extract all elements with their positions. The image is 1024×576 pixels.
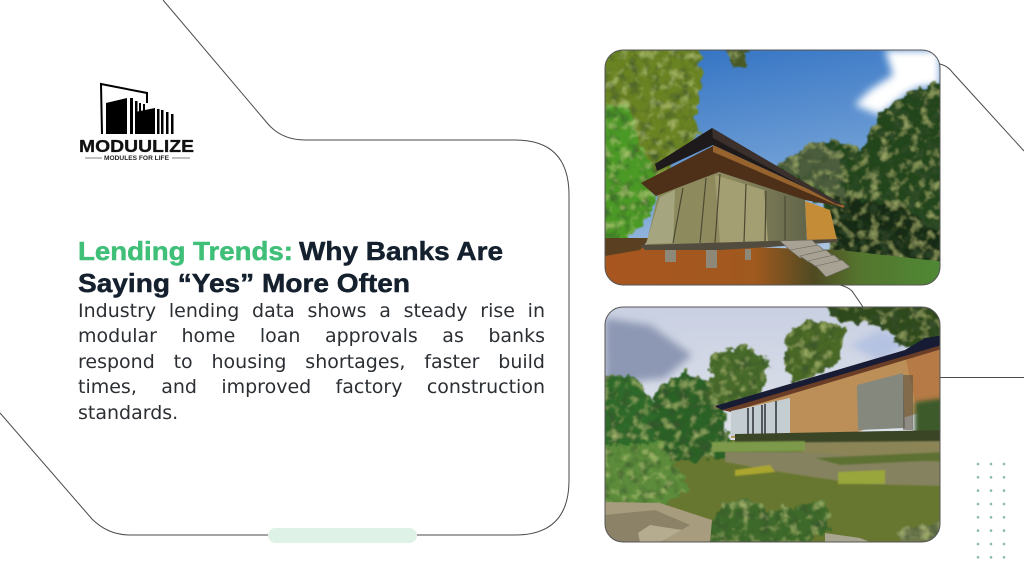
- photo: long house with garden: [600, 300, 945, 545]
- terraces: [712, 441, 945, 486]
- roof: [715, 335, 945, 410]
- house: glass wall: [646, 172, 807, 245]
- clouds: [855, 50, 940, 115]
- logo frame: [101, 84, 147, 134]
- ground: [606, 244, 940, 284]
- outline connector: top right: [940, 64, 1024, 151]
- dot grid: [977, 463, 1005, 559]
- logo: [79, 84, 194, 162]
- house: soffit: [641, 146, 845, 207]
- lawn: [656, 440, 940, 542]
- heading line 2: Saying “Yes” More Often: [78, 268, 410, 298]
- house: mullions: [673, 174, 785, 243]
- photo: house among trees: [600, 45, 945, 290]
- house: roof: [655, 128, 843, 205]
- body text: Industry lending data shows a steady rise in: [78, 300, 545, 322]
- logo building: [106, 98, 174, 134]
- logo tagline: MODULES FOR LIFE: [104, 155, 170, 162]
- body text: modular home loan approvals as banks: [78, 325, 545, 347]
- plants foreground: [710, 498, 940, 542]
- planting strip under house: [735, 430, 940, 443]
- windows: [731, 398, 790, 436]
- outline connector: right: [940, 376, 1024, 378]
- body text: [78, 300, 545, 424]
- house: stairs: [780, 240, 850, 277]
- background outline: main panel: [0, 0, 569, 535]
- outline connector: between photos: [840, 285, 863, 307]
- trees: [606, 308, 940, 464]
- pill accent: [268, 528, 417, 543]
- house: wood panel: [805, 201, 837, 240]
- trees left: [606, 50, 751, 238]
- soffit: [715, 340, 945, 412]
- storm cloud: [605, 318, 692, 385]
- body text: respond to housing shortages, faster build: [78, 351, 545, 373]
- logo name: MODUULIZE: [79, 136, 194, 156]
- trees right: [775, 80, 945, 270]
- plants left: [606, 438, 690, 505]
- photo 2 border: [605, 307, 940, 542]
- garden steps: [605, 502, 712, 542]
- photo 1 border: [605, 50, 940, 285]
- house: deck and posts: [640, 239, 838, 250]
- body text: times, and improved factory construction: [78, 376, 545, 398]
- body text: standards.: [78, 402, 178, 424]
- stone panel: [857, 373, 905, 430]
- shrubs right of house: [912, 396, 940, 431]
- house wall: [731, 360, 938, 438]
- heading: [78, 236, 503, 298]
- heading line 1: Why Banks Are: [299, 236, 503, 266]
- heading line 1 accent: Lending Trends:: [78, 236, 293, 266]
